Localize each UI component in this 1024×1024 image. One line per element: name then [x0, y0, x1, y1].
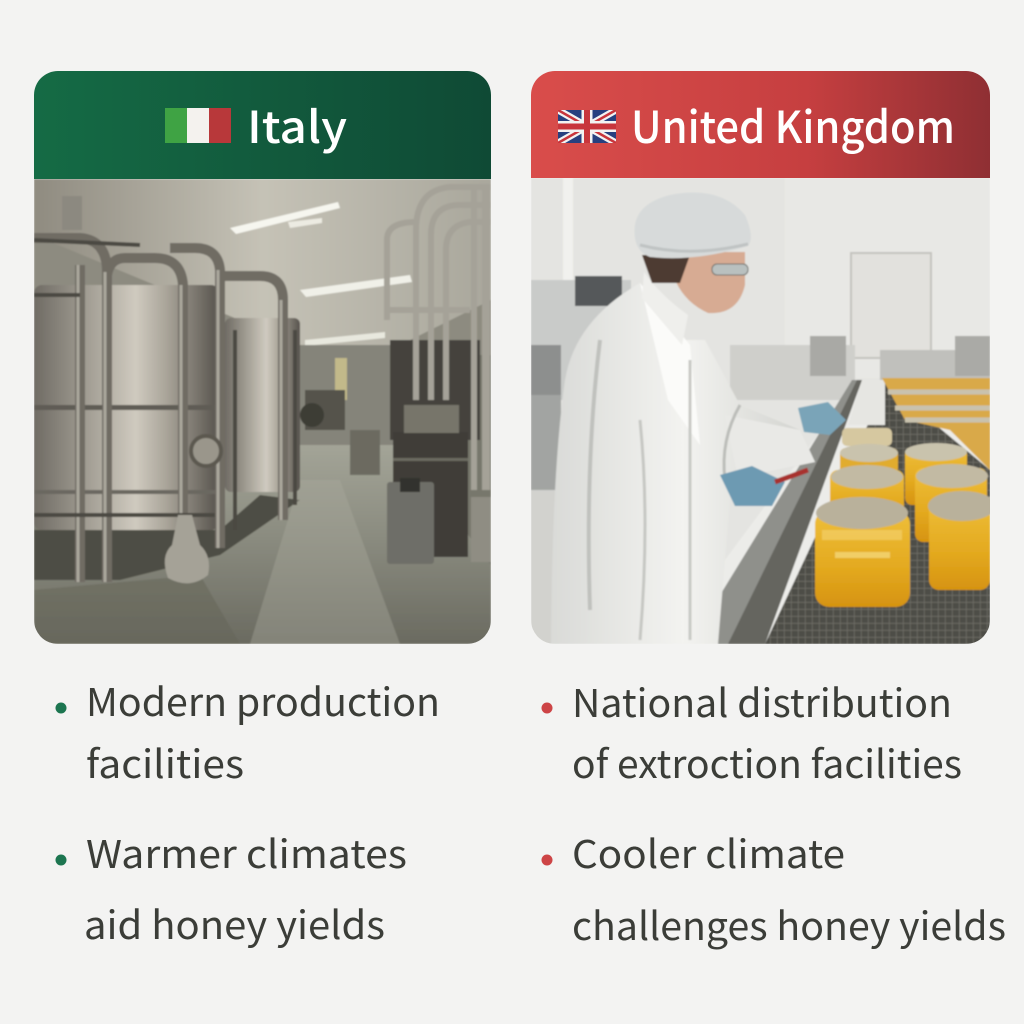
- conveyor: [718, 379, 990, 644]
- technician: [551, 192, 846, 644]
- UK heading: United Kingdom: [631, 92, 955, 156]
- Italy heading: Italy: [247, 92, 347, 156]
- jars: [815, 378, 996, 607]
- bullet: production facilities: facilities: [86, 734, 244, 790]
- UK bullet list: [542, 673, 1006, 952]
- Italy header band: [34, 71, 491, 179]
- bullet: production facilities: Modern production: [86, 672, 440, 728]
- photo: stainless steel production facility: [34, 179, 491, 644]
- icon: UK flag: [558, 110, 616, 143]
- panel: United Kingdom: [531, 71, 996, 644]
- bullet: warmer climates: [56, 824, 407, 951]
- bullet: distribution: [542, 673, 962, 790]
- bullet: distribution: National distribution: [572, 673, 952, 729]
- bullet: warmer climates: aid honey yields: [84, 895, 385, 951]
- icon: Italian flag: [165, 108, 231, 143]
- Italy bullet list: [56, 672, 440, 951]
- bullet: warmer climates: Warmer climates: [86, 824, 407, 880]
- bullet: cooler climate: challenges honey yields: [572, 896, 1006, 952]
- photo: lab technician inspecting honey jars: [531, 178, 996, 644]
- bullet: production facilities: [56, 672, 440, 790]
- bullet: cooler climate: [542, 824, 1006, 952]
- panel: Italy: [34, 71, 491, 644]
- bullet: distribution: of extroction facilities: [572, 734, 962, 790]
- UK header band: [531, 71, 990, 178]
- bullet: cooler climate: Cooler climate: [572, 824, 845, 880]
